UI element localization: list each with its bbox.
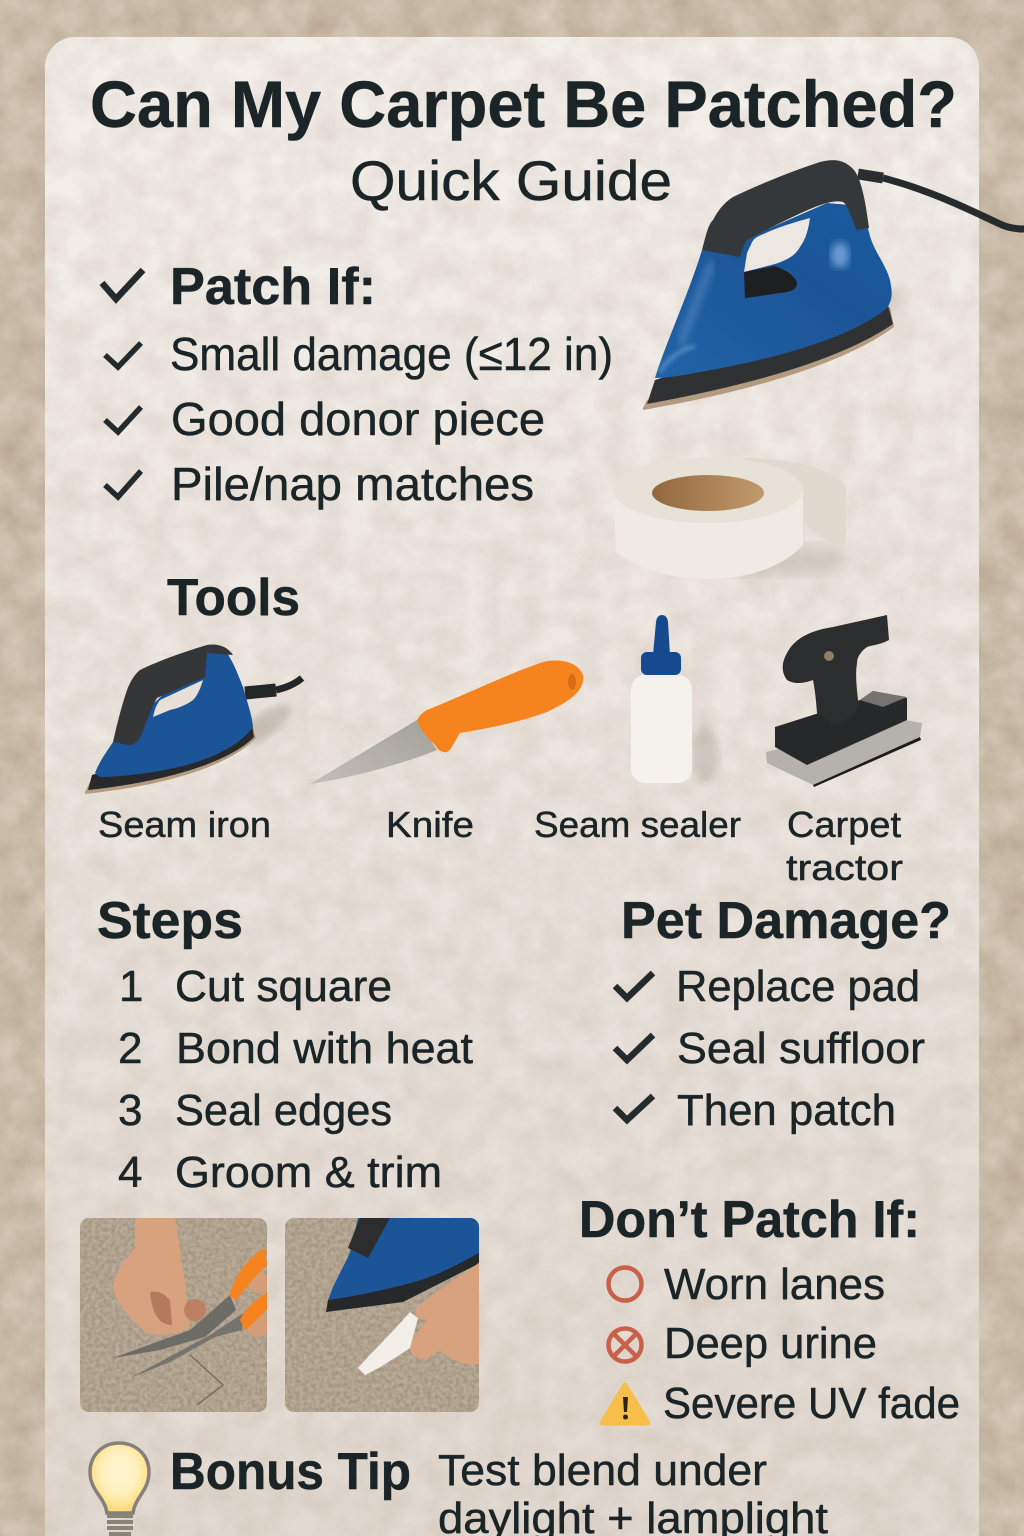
step 3: Seal edges	[175, 1086, 392, 1135]
heading: patch if: Patch If:	[170, 258, 376, 316]
icon: heading check	[102, 270, 143, 299]
icon: carpet tractor	[766, 615, 922, 787]
heading: don't patch if: Don’t Patch If:	[579, 1191, 920, 1249]
item: deep urine: Deep urine	[664, 1319, 877, 1368]
icon: knife	[310, 661, 583, 784]
label: carpet tractor	[786, 804, 903, 888]
icon: check pile match	[105, 471, 141, 497]
step 1: Cut square	[175, 962, 392, 1011]
panel: patch if	[102, 258, 613, 510]
step 2: Bond with heat	[176, 1024, 473, 1073]
label: knife: Knife	[386, 804, 474, 845]
icon: check donor piece	[105, 407, 141, 432]
icon: check small damage	[105, 343, 141, 367]
panel: tools	[85, 569, 922, 888]
step 4: 4	[118, 1148, 142, 1197]
label: carpet tractor: Carpet	[787, 804, 901, 845]
panel: steps	[97, 892, 473, 1197]
icon: seam sealer bottle	[631, 615, 719, 783]
item: then patch: Then patch	[677, 1086, 896, 1135]
icon: red crossed circle	[608, 1328, 642, 1362]
icon: seam tape roll	[613, 457, 855, 579]
text: bonus tip body: Test blend under	[438, 1446, 767, 1495]
icon: red circle	[608, 1268, 642, 1300]
text: bonus tip body	[438, 1446, 828, 1536]
icon: light bulb	[90, 1443, 149, 1534]
panel: don't patch if	[579, 1191, 960, 1428]
heading: steps: Steps	[97, 892, 243, 950]
item: severe uv fade: Severe UV fade	[663, 1379, 960, 1428]
heading: pet damage: Pet Damage?	[621, 892, 951, 950]
panel: bonus tip	[90, 1443, 828, 1536]
icon: warning triangle	[602, 1385, 648, 1423]
step 4: Groom & trim	[175, 1148, 442, 1197]
label: seam sealer: Seam sealer	[534, 804, 741, 845]
step 3: 3	[118, 1086, 142, 1135]
icon: check seal subfloor	[615, 1035, 653, 1060]
item: replace pad: Replace pad	[676, 962, 920, 1011]
icon: large seam iron	[643, 160, 1024, 410]
icon: check then patch	[615, 1096, 653, 1120]
label: carpet tractor: tractor	[786, 847, 903, 888]
title: Can My Carpet Be Patched?	[90, 67, 957, 141]
heading: tools: Tools	[167, 569, 300, 627]
item: donor piece: Good donor piece	[171, 393, 545, 445]
item: seal subfloor: Seal suffloor	[677, 1024, 925, 1073]
subtitle: Quick Guide	[350, 149, 672, 212]
icon: small seam iron	[85, 644, 302, 794]
item: pile match: Pile/nap matches	[171, 458, 534, 510]
icon: check replace pad	[615, 973, 653, 998]
photo: cutting carpet with scissors	[80, 1218, 270, 1412]
heading: bonus tip: Bonus Tip	[170, 1443, 411, 1501]
step 2: 2	[118, 1024, 142, 1073]
photo: iron and seam sealer on carpet	[285, 1218, 480, 1412]
item: small damage: Small damage (≤12 in)	[170, 328, 613, 380]
step 1: 1	[119, 962, 143, 1011]
label: seam iron: Seam iron	[98, 804, 271, 845]
item: worn lanes: Worn lanes	[664, 1260, 885, 1309]
panel: pet damage	[615, 892, 951, 1135]
